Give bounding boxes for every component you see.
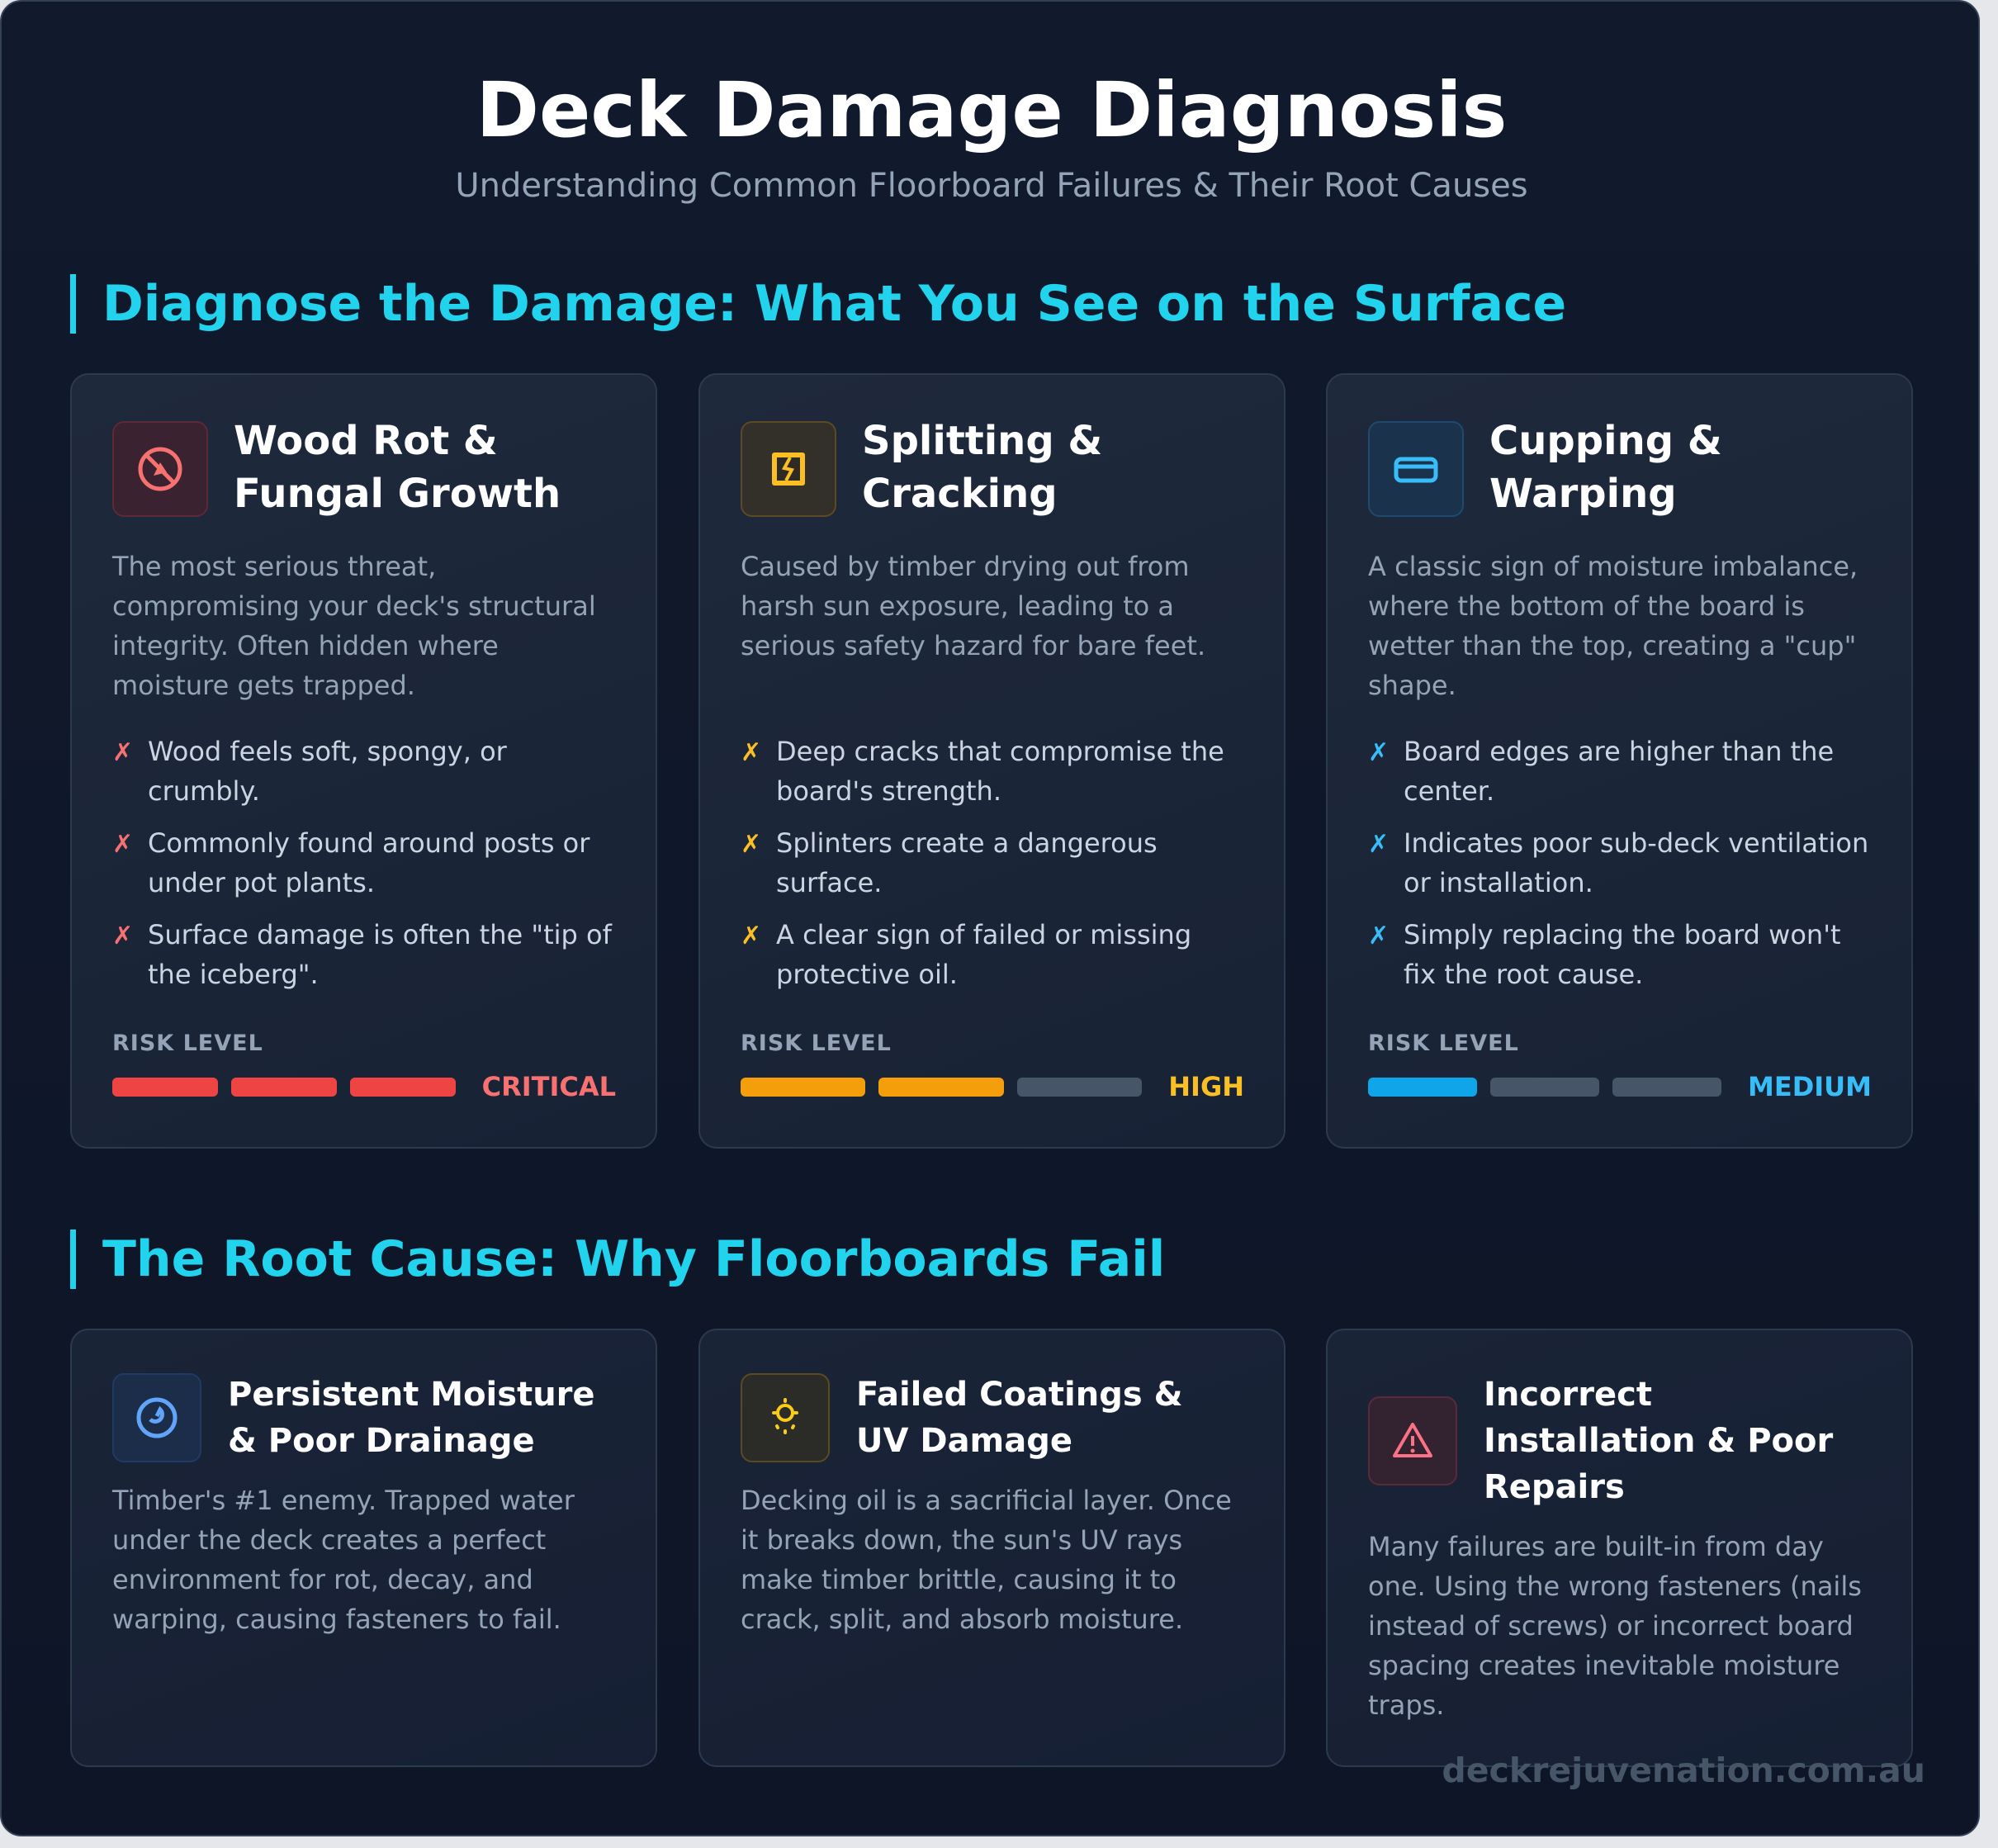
risk bar: medium: MEDIUM	[1748, 1071, 1872, 1102]
bullet list: ✗	[741, 830, 761, 859]
bullet list: ✗	[1368, 922, 1389, 950]
card title: Installation & Poor	[1484, 1422, 1833, 1460]
description: The most serious threat, compromising your deck's structural integrity. Often hidden where moisture gets trapped.	[112, 551, 596, 701]
bullet list: ✗	[1368, 830, 1389, 859]
card title	[856, 1376, 1182, 1460]
card title	[862, 418, 1102, 517]
card title: Splitting &	[862, 418, 1102, 464]
description: A classic sign of moisture imbalance, where the bottom of the board is wetter than the top, creating a "cup" shape.	[1368, 551, 1858, 701]
risk label: RISK LEVEL	[741, 1031, 892, 1056]
panel: cupping	[1326, 373, 1913, 1149]
risk bar: medium	[1368, 1071, 1872, 1102]
footer: website: deckrejuvenation.com.au	[1442, 1751, 1925, 1790]
bullet list	[741, 736, 1224, 990]
bullet list: ✗	[112, 830, 133, 859]
card title: Incorrect	[1484, 1376, 1652, 1414]
card title: Cupping &	[1489, 418, 1722, 464]
card title: UV Damage	[856, 1422, 1072, 1460]
description: Timber's #1 enemy. Trapped water under the deck creates a perfect environment for rot, decay, and warping, causing fasteners to fail.	[112, 1485, 575, 1635]
card title: Failed Coatings &	[856, 1376, 1182, 1414]
bullet list: ✗	[1368, 738, 1389, 767]
card title	[1484, 1376, 1833, 1506]
icon: warning	[1368, 1396, 1457, 1486]
bullet list: Board edges are higher than the center.	[1404, 736, 1834, 807]
panel: coatings	[698, 1329, 1285, 1767]
bullet list: Surface damage is often the "tip of the iceberg".	[148, 919, 612, 990]
card title: Warping	[1489, 471, 1677, 517]
card title: Cracking	[862, 471, 1058, 517]
subtitle: Understanding Common Floorboard Failures & Their Root Causes	[455, 167, 1528, 205]
icon: water	[112, 1373, 201, 1462]
risk bar: critical: CRITICAL	[482, 1071, 616, 1102]
bullet list: Deep cracks that compromise the board's strength.	[776, 736, 1224, 807]
icon: crack	[741, 421, 836, 517]
risk bar: critical	[112, 1071, 616, 1102]
card title: Wood Rot &	[234, 418, 498, 464]
panel: splitting	[698, 373, 1285, 1149]
bullet list: Simply replacing the board won't fix the root cause.	[1404, 919, 1841, 990]
icon: rot	[112, 421, 208, 517]
icon: sun	[741, 1373, 830, 1462]
bullet list: ✗	[112, 738, 133, 767]
risk bar: high	[741, 1071, 1244, 1102]
panel: moisture	[70, 1329, 657, 1767]
card title	[228, 1376, 595, 1460]
title: Deck Damage Diagnosis	[476, 66, 1507, 154]
bullet list: Splinters create a dangerous surface.	[776, 827, 1158, 898]
panel: installation	[1326, 1329, 1913, 1767]
bullet list: Commonly found around posts or under pot plants.	[148, 827, 589, 898]
card title	[1489, 418, 1722, 517]
card title	[234, 418, 561, 517]
bullet list: Indicates poor sub-deck ventilation or installation.	[1404, 827, 1868, 898]
section heading: diagnose: Diagnose the Damage: What You See on the Surface	[102, 275, 1566, 333]
panel: wood rot	[70, 373, 657, 1149]
card title: Persistent Moisture	[228, 1376, 595, 1414]
section heading: root cause: The Root Cause: Why Floorboards Fail	[102, 1230, 1165, 1288]
card title: & Poor Drainage	[228, 1422, 535, 1460]
bullet list: ✗	[112, 922, 133, 950]
bullet list	[112, 736, 613, 990]
bullet list: Wood feels soft, spongy, or crumbly.	[148, 736, 507, 807]
risk label: RISK LEVEL	[112, 1031, 263, 1056]
bullet list: A clear sign of failed or missing protective oil.	[776, 919, 1191, 990]
bullet list: ✗	[741, 922, 761, 950]
card title: Fungal Growth	[234, 471, 561, 517]
card title: Repairs	[1484, 1468, 1625, 1506]
description: Caused by timber drying out from harsh sun exposure, leading to a serious safety hazard for bare feet.	[741, 551, 1205, 661]
icon: cup	[1368, 421, 1464, 517]
description: Many failures are built-in from day one. Using the wrong fasteners (nails instead of screws) or incorrect board spacing creates inevitable moisture traps.	[1368, 1531, 1862, 1721]
bullet list: ✗	[741, 738, 761, 767]
risk label: RISK LEVEL	[1368, 1031, 1519, 1056]
description: Decking oil is a sacrificial layer. Once it breaks down, the sun's UV rays make timber brittle, causing it to crack, split, and absorb moisture.	[741, 1485, 1232, 1635]
bullet list	[1368, 736, 1868, 990]
risk bar: high: HIGH	[1168, 1071, 1244, 1102]
